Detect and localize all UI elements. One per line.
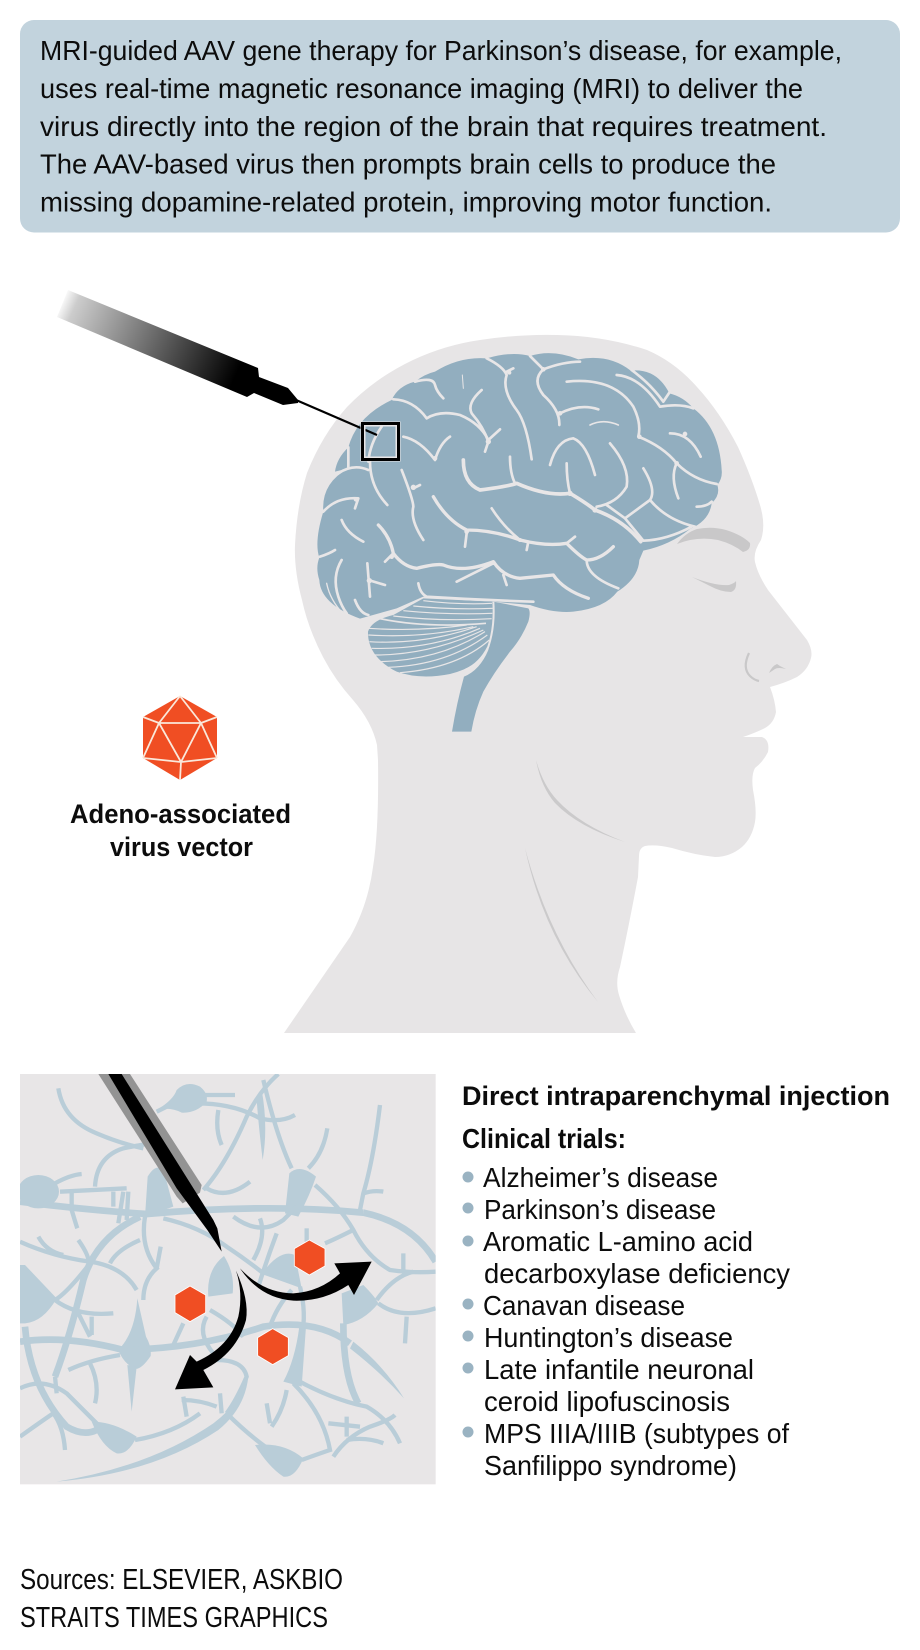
icon: adeno-associated virus capsid xyxy=(143,696,217,780)
needle xyxy=(296,400,377,435)
virus label: Adeno-associated xyxy=(70,799,291,829)
cerebellum folds xyxy=(368,601,494,673)
heading: injection method: Direct intraparenchymal injection xyxy=(462,1081,890,1111)
list: clinical trial diseases: ceroid lipofuscinosis xyxy=(484,1386,730,1417)
brain sulci xyxy=(320,356,717,615)
intro panel xyxy=(20,20,900,232)
intro text: missing dopamine-related protein, improving motor function. xyxy=(40,186,772,218)
virus label xyxy=(70,799,291,862)
injection needle xyxy=(98,1074,222,1252)
list: clinical trial diseases: Alzheimer’s disease xyxy=(483,1162,718,1193)
list: clinical trial diseases: Canavan disease xyxy=(483,1290,685,1321)
head illustration xyxy=(284,335,812,1033)
eyebrow xyxy=(677,528,750,552)
syringe barrel xyxy=(57,290,298,405)
list: clinical trial diseases: Sanfilippo syndrome) xyxy=(484,1450,737,1481)
list: clinical trial diseases: Aromatic L-amino acid xyxy=(483,1226,753,1257)
virus label: virus vector xyxy=(110,832,253,862)
closed eye xyxy=(692,577,736,592)
list: clinical trial diseases: MPS IIIA/IIIB (subtypes of xyxy=(484,1418,789,1449)
icon: virus particle xyxy=(294,1240,325,1275)
source credits: STRAITS TIMES GRAPHICS xyxy=(20,1602,328,1634)
jaw crease xyxy=(536,760,625,842)
sulci junctions xyxy=(354,367,687,583)
intro text: MRI-guided AAV gene therapy for Parkinson’s disease, for example, xyxy=(40,35,842,66)
neck crease xyxy=(525,848,598,1002)
nostril xyxy=(769,664,786,673)
arrow: spread down-left xyxy=(175,1271,247,1389)
head silhouette xyxy=(284,335,812,1033)
list: clinical trial diseases: Late infantile neuronal xyxy=(484,1354,754,1385)
cerebrum xyxy=(317,353,722,619)
intro text xyxy=(40,35,842,218)
cerebellum xyxy=(368,598,494,677)
brainstem xyxy=(452,602,530,732)
intro text: The AAV-based virus then prompts brain cells to produce the xyxy=(40,148,776,180)
target box xyxy=(362,424,398,460)
list: clinical trial diseases: Huntington’s disease xyxy=(484,1322,733,1353)
nose crease xyxy=(746,653,759,681)
list: clinical trial diseases: Parkinson’s disease xyxy=(484,1194,716,1225)
intro text: uses real-time magnetic resonance imaging (MRI) to deliver the xyxy=(40,73,803,104)
source credits: Sources: ELSEVIER, ASKBIO xyxy=(20,1564,343,1596)
brain xyxy=(317,353,722,732)
syringe xyxy=(57,290,377,435)
panel: injection site close-up xyxy=(18,1074,436,1484)
intro text: virus directly into the region of the brain that requires treatment. xyxy=(40,111,827,142)
subheading: clinical trials: Clinical trials: xyxy=(462,1123,626,1154)
icon: virus particle xyxy=(175,1286,206,1322)
arrow: spread right xyxy=(240,1262,372,1301)
list: clinical trial diseases xyxy=(462,1162,790,1481)
icon: virus particle xyxy=(258,1329,288,1365)
list: clinical trial diseases: decarboxylase deficiency xyxy=(484,1258,790,1289)
source credits xyxy=(20,1564,343,1634)
neuron network xyxy=(18,1074,436,1482)
